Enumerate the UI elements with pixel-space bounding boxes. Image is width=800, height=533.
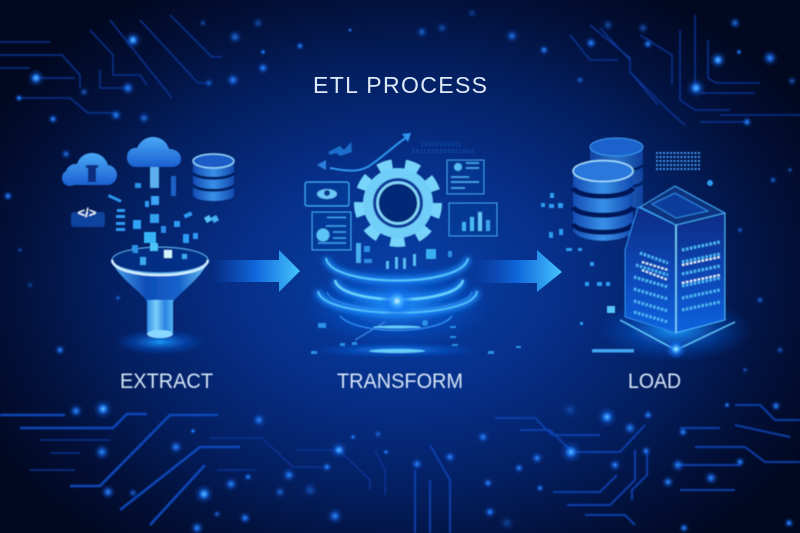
data bars above platform [356, 243, 452, 269]
icon: cloud with stem [127, 137, 181, 188]
icon: trend line [317, 133, 411, 171]
glowing base bar [592, 349, 634, 352]
icon: front database [573, 160, 633, 241]
server lights [634, 242, 720, 322]
arrow: extract to transform [212, 250, 300, 292]
stage label: extract: EXTRACT [120, 370, 213, 393]
icon: code chip: </> [78, 205, 97, 220]
stage label: transform: TRANSFORM [337, 370, 463, 393]
base glow [597, 298, 753, 362]
panel: eye card [305, 182, 349, 206]
icon: back database [590, 138, 643, 208]
icon: gear [360, 165, 436, 241]
arrow: transform to load [474, 250, 562, 292]
small pixels [541, 180, 713, 325]
platform sparks [311, 320, 521, 354]
dot matrix panel [656, 153, 700, 169]
panel: load stage [541, 138, 753, 393]
panel: extract stage [62, 137, 234, 393]
data particles falling into funnel [108, 176, 219, 252]
small code text [412, 142, 474, 155]
small code text: 0011010100001010 [412, 149, 474, 155]
title: ETL PROCESS [313, 72, 487, 98]
panel: chart card left [312, 212, 351, 250]
icon: funnel [112, 243, 208, 355]
panel: bar chart card [449, 203, 497, 236]
icon: cloud with storage [62, 153, 117, 186]
panel: transform stage [302, 133, 521, 393]
glowing platform rings [302, 258, 492, 358]
icon: database [193, 154, 234, 201]
icon: server tower [620, 186, 735, 359]
panel: card right top [447, 160, 484, 194]
small code text: 10110101011 [421, 142, 461, 148]
stage label: load: LOAD [628, 370, 681, 393]
icon: code chip [71, 205, 105, 227]
